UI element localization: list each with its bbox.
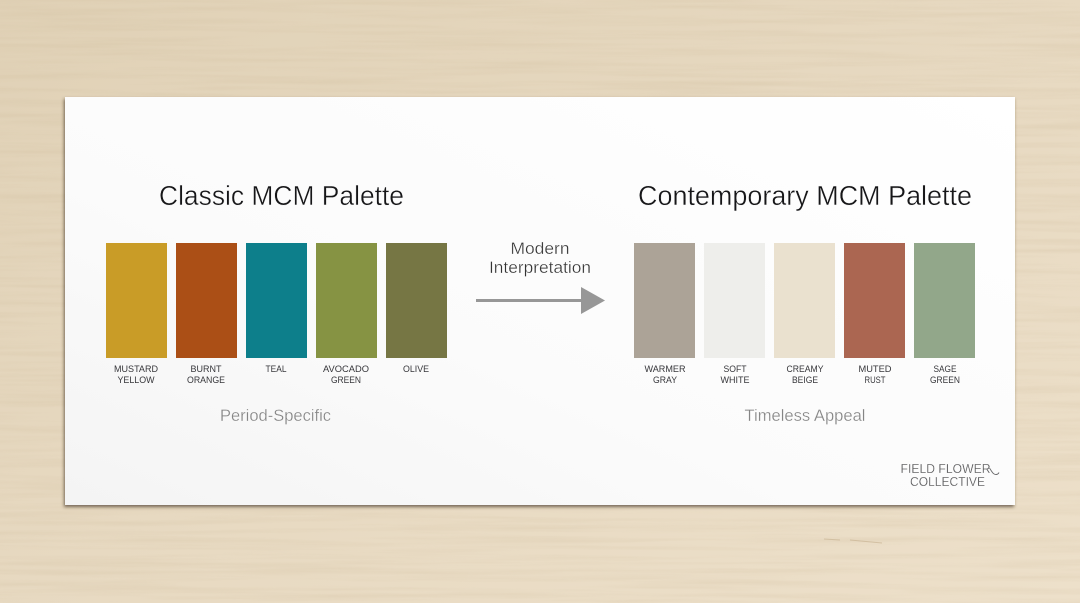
swatch: avocado green: AVOCADO (323, 364, 369, 374)
logo: field flower collective (900, 461, 999, 489)
logo: field flower collective: COLLECTIVE (910, 474, 985, 489)
panel: contemporary palette (634, 180, 975, 425)
swatch: warmer gray: GRAY (653, 375, 677, 385)
swatch: warmer gray (634, 243, 695, 385)
swatch: soft white (704, 243, 765, 385)
swatch: muted rust: MUTED (858, 364, 892, 374)
white card panel (65, 97, 1015, 505)
swatch: mustard yellow: YELLOW (118, 375, 155, 385)
swatch: sage green (914, 243, 975, 385)
swatch: olive: OLIVE (403, 364, 429, 374)
caption: period-specific: Period-Specific (220, 407, 331, 425)
swatch: warmer gray: WARMER (644, 364, 686, 374)
arrow label (489, 240, 591, 277)
arrow label: Modern (510, 240, 570, 258)
panel: classic palette (106, 180, 447, 425)
arrow: modern interpretation (476, 240, 605, 314)
swatch: creamy beige: BEIGE (792, 375, 818, 385)
arrow label: Interpretation (489, 259, 591, 277)
swatch: creamy beige (774, 243, 835, 385)
swatch: sage green: SAGE (934, 364, 956, 374)
swatch: mustard yellow: MUSTARD (114, 364, 158, 374)
swatch: muted rust: RUST (864, 375, 886, 385)
swatch: burnt orange: ORANGE (187, 375, 225, 385)
swatch: soft white: SOFT (724, 364, 747, 374)
swatch: avocado green (316, 243, 377, 385)
swatch: teal (246, 243, 307, 374)
swatch: burnt orange: BURNT (190, 364, 222, 374)
swatch: teal: TEAL (266, 364, 286, 374)
swatch: creamy beige: CREAMY (786, 364, 824, 374)
heading: classic palette: Classic MCM Palette (159, 180, 404, 211)
arrow shape (476, 287, 605, 314)
swatch: muted rust (844, 243, 905, 385)
swatch: soft white: WHITE (720, 375, 750, 385)
logo: field flower collective: FIELD FLOWER (900, 461, 990, 476)
swatch: mustard yellow (106, 243, 167, 385)
swatch: sage green: GREEN (930, 375, 960, 385)
swatch: olive (386, 243, 447, 374)
heading: contemporary palette: Contemporary MCM Palette (638, 180, 972, 211)
swatch: avocado green: GREEN (331, 375, 361, 385)
swatch: burnt orange (176, 243, 237, 385)
caption: timeless appeal: Timeless Appeal (744, 407, 866, 425)
